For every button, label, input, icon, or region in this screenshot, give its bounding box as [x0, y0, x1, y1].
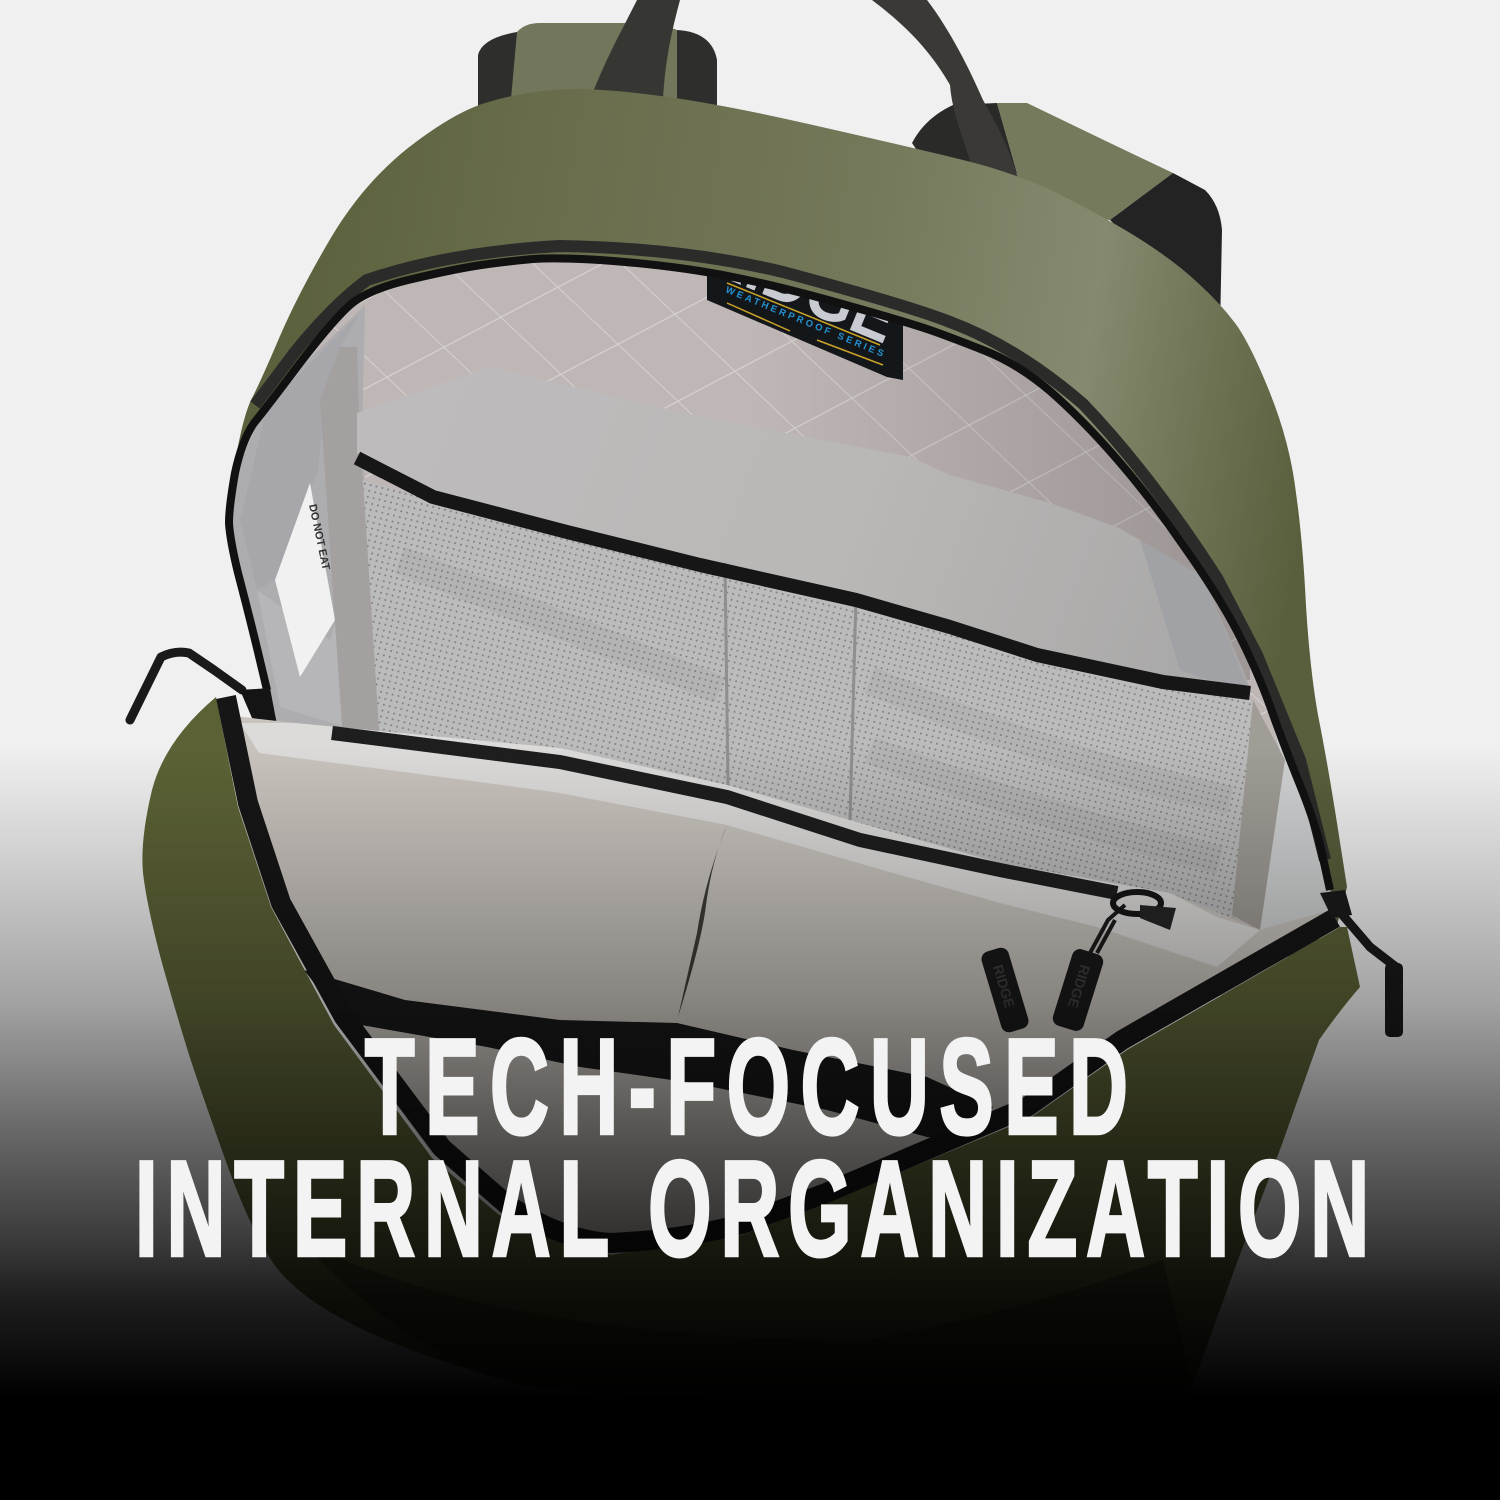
zipper tag two [1051, 947, 1105, 1033]
main zipper band [255, 246, 1325, 860]
headline line two: INTERNAL ORGANIZATION [135, 1132, 1369, 1285]
right zipper slider [1320, 890, 1352, 918]
front flap olive shell [142, 697, 1360, 1420]
RIDGE label [707, 276, 903, 380]
dark slot on binding [332, 733, 1117, 893]
white care tag [275, 483, 335, 677]
center pleat [678, 825, 727, 1017]
left zipper pull [130, 652, 242, 720]
interior back quilted panel [229, 258, 1340, 1000]
right grey pillar [1232, 700, 1285, 930]
light binding strip [240, 723, 1260, 967]
headline [135, 1010, 1369, 1285]
right zipper pull [1340, 912, 1396, 967]
right back pad olive [997, 103, 1173, 220]
quilt shading [850, 326, 1250, 680]
laptop sleeve [357, 367, 1252, 693]
black lower slot [304, 970, 993, 1140]
headline line one: TECH-FOCUSED [365, 1010, 1128, 1163]
left side wall [233, 305, 365, 727]
RIDGE label: RIDGE [694, 210, 909, 358]
right white lining [1256, 726, 1331, 930]
white care tag: DO NOT EAT [306, 503, 332, 571]
interior contents [233, 276, 1331, 930]
zipper pull cords [1090, 905, 1125, 953]
lower pocket panel [225, 715, 1337, 1247]
left lining [257, 590, 345, 727]
zipper tag one: RIDGE [990, 963, 1018, 1010]
right shoulder strap black [1110, 173, 1222, 330]
left zipper base [240, 688, 278, 730]
pocket zipper end [1140, 905, 1176, 930]
top handle right arm [872, 0, 1020, 185]
flap zipper band [226, 697, 1335, 1243]
pocket dividers [725, 563, 856, 820]
pocket zipper ring [1113, 892, 1161, 914]
zipper tag one [980, 946, 1030, 1034]
RIDGE label: WEATHERPROOF SERIES [724, 285, 885, 360]
left back pad black edges [478, 30, 717, 115]
sleeve shaded side [1140, 540, 1250, 693]
right zipper tag [1385, 963, 1403, 1037]
pocket binding [357, 458, 1250, 693]
main olive shell [227, 89, 1347, 1000]
bottom black band [0, 1400, 1500, 1500]
silver side pocket [240, 313, 360, 590]
mesh shadow folds [400, 560, 1230, 860]
top handle left arm [590, 0, 680, 100]
right back pad black [912, 103, 1017, 200]
grey side pillar [320, 347, 379, 731]
lower bag base [300, 1240, 1192, 1420]
mesh pocket panel [363, 480, 1253, 925]
bottom dark gradient overlay [0, 745, 1500, 1400]
main zipper teeth [229, 258, 1330, 890]
zipper tag two: RIDGE [1065, 963, 1093, 1010]
left back pad olive [510, 23, 677, 110]
